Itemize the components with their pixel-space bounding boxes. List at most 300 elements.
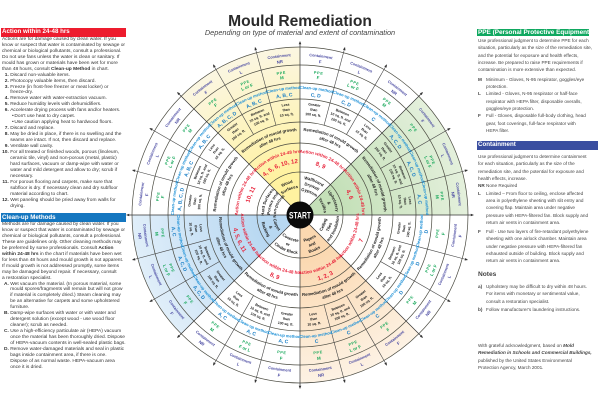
upholstery cell: less than 10 sq ft: Less — [407, 196, 413, 205]
concrete cell: less than 10 sq ft: 10 sq. ft. — [226, 296, 240, 308]
clean-up lettered list: of HEPA-vacuum contents in well-sealed plastic bags. — [10, 341, 126, 346]
wallboard common labels: after 48 hrs — [319, 137, 341, 148]
action numbered list: freeze-dry. — [10, 90, 33, 95]
upholstery cell: less than 10 sq ft: Clean-up method — [421, 181, 431, 216]
clean-up lettered list: once the material has been thoroughly dried. Dispose — [10, 335, 125, 340]
papers cell: less than 10 sq ft: Less — [309, 312, 317, 317]
action numbered list: 4. — [5, 96, 9, 101]
clean-up lettered list: bags inside containment area, if there is one. — [10, 353, 107, 358]
hard surfaces cell: greater than 100 sq ft: Containment — [138, 181, 145, 206]
heading: notes: Notes — [478, 271, 496, 278]
action numbered list: Ventilate wall cavity. — [10, 144, 53, 149]
upholstery cell: between 10 and 100 sq ft: Between — [398, 165, 407, 180]
carpet cell: between 10 and 100 sq ft: Clean-up method — [179, 245, 198, 278]
containment levels list: sheeting with one airlock chamber. Maintain area — [486, 236, 587, 241]
hard surfaces common labels — [213, 157, 284, 218]
panel: action within 24-48 hrs — [1, 28, 126, 210]
ceiling common labels: 7 — [358, 237, 366, 243]
wood cell: less than 10 sq ft: Clean-up method — [266, 84, 301, 94]
PPE levels list: respirator with HEPA filter, disposable overalls, — [486, 99, 582, 104]
clean-up lettered list: D. — [4, 347, 9, 352]
upholstery cell: between 10 and 100 sq ft: 10 sq. ft. and — [391, 164, 404, 185]
sector: wood surfaces — [193, 54, 300, 194]
wallboard cell: between 10 and 100 sq ft: Clean-up method — [333, 90, 364, 106]
upholstery cell: between 10 and 100 sq ft: Clean-up method — [408, 150, 427, 184]
concrete cell: between 10 and 100 sq ft: Between — [254, 303, 269, 312]
upholstery common labels: Remediation of mould growth — [362, 156, 387, 212]
wallboard cell: less than 10 sq ft: Containment — [388, 80, 407, 96]
clean-up lettered list: furniture. — [10, 305, 29, 310]
concrete cell: between 10 and 100 sq ft: PPE — [242, 340, 252, 347]
hard surfaces cell: between 10 and 100 sq ft: 10 sq. ft. and — [196, 164, 209, 185]
concrete common labels: after 48 hrs — [256, 287, 280, 301]
clean-up lettered list: be an alternative for carpets and some upholstered — [10, 299, 120, 304]
containment levels list: NR — [478, 183, 485, 188]
sector: concrete or cinder block — [196, 234, 302, 377]
ceiling cell: between 10 and 100 sq ft: Between — [388, 246, 397, 261]
upholstery common labels: 4, 6 — [346, 190, 354, 200]
papers cell: greater than 100 sq ft: Containment — [384, 329, 406, 347]
containment levels list: return air vents in containment area. — [486, 220, 560, 225]
action numbered list: material according to chart. — [10, 192, 69, 197]
wallboard common labels: Gypsum — [301, 188, 318, 197]
PPE levels list — [477, 76, 589, 134]
upholstery cell: less than 10 sq ft — [398, 182, 462, 215]
action numbered list: Accelerate drying process with fans and/or heaters. — [10, 108, 120, 113]
hard surfaces cell: between 10 and 100 sq ft: Clean-up method — [173, 149, 192, 183]
hard surfaces cell: less than 10 sq ft: Less — [208, 143, 216, 152]
action numbered list: Photocopy valuable items, then discard. — [10, 79, 96, 84]
concrete cell: greater than 100 sq ft: A, C — [278, 338, 289, 346]
carpet cell: less than 10 sq ft: M — [154, 232, 159, 236]
wood cell: greater than 100 sq ft: F — [213, 102, 219, 108]
concrete cell: between 10 and 100 sq ft: 10 sq. ft. and — [249, 306, 271, 318]
wallboard cell: less than 10 sq ft: C — [372, 118, 376, 122]
ceiling cell: between 10 and 100 sq ft: 10 sq. ft. and — [391, 244, 403, 266]
papers common labels: and — [308, 240, 317, 248]
hard surfaces common labels: after 48 hrs — [220, 172, 234, 197]
papers cell: between 10 and 100 sq ft: 10 sq. ft. and — [329, 306, 351, 318]
containment levels list: return air vents in containment area. — [486, 258, 560, 263]
papers cell: greater than 100 sq ft: 100 sq. ft. — [359, 296, 375, 309]
hard surfaces cell: less than 10 sq ft: M — [187, 127, 193, 134]
wood cell: between 10 and 100 sq ft: 100 sq. ft. — [253, 117, 270, 127]
upholstery cell: greater than 100 sq ft: A, C, D — [387, 133, 403, 151]
hard surfaces cell: greater than 100 sq ft — [138, 182, 202, 215]
upholstery cell: greater than 100 sq ft: Containment — [418, 107, 436, 129]
containment intro text: Use professional judgment to determine containment — [478, 154, 587, 159]
wood cell: between 10 and 100 sq ft: Containment — [227, 61, 251, 74]
clean-up lettered list: cleaner); scrub as needed. — [10, 323, 68, 328]
clean-up lettered list: once it is dried. — [10, 365, 43, 370]
carpet cell: between 10 and 100 sq ft: L or F — [162, 264, 171, 277]
upholstery cell: greater than 100 sq ft: Clean-up method — [388, 122, 414, 153]
papers cell: less than 10 sq ft — [300, 312, 332, 377]
PPE levels list: gear, foot coverings, full-face respirator with — [486, 121, 576, 126]
action numbered list: Reduce humidity levels with dehumidifiers. — [10, 102, 101, 107]
wood common labels: Surfaces — [279, 182, 300, 196]
wood cell: greater than 100 sq ft — [193, 80, 246, 141]
concrete cell: greater than 100 sq ft: F — [277, 372, 281, 378]
hard surfaces cell: greater than 100 sq ft: Greater — [187, 193, 193, 207]
containment levels list: covering flap. Maintain area under negative — [486, 205, 575, 210]
ceiling cell: less than 10 sq ft: M — [412, 300, 418, 306]
clean-up lettered list: mould spores/fragments will remain but will not grow — [10, 287, 122, 292]
papers cell: less than 10 sq ft: than — [310, 317, 318, 322]
notes list: b) — [478, 307, 482, 312]
clean-up lettered list: Wet vacuum the material. (In porous material, some — [10, 282, 121, 287]
wallboard cell: greater than 100 sq ft: F — [319, 60, 322, 64]
action intro text — [1, 37, 126, 73]
ceiling common labels: Ceiling — [318, 217, 329, 232]
carpet cell: greater than 100 sq ft: Clean-up method — [192, 274, 217, 304]
carpet cell: between 10 and 100 sq ft: Containment — [150, 263, 163, 287]
panel: containment — [477, 141, 598, 265]
wood common labels: Action within 24-48 hrs — [251, 144, 303, 173]
notes list: Upholstery may be difficult to dry within 48 hours. — [486, 284, 587, 289]
action numbered list: Use caution applying heat to hardwood floors. — [14, 120, 113, 125]
notes list: Follow manufacturer's laundering instructions. — [486, 307, 580, 312]
wood cell: between 10 and 100 sq ft: Between — [250, 108, 265, 117]
wood cell: less than 10 sq ft: PPE — [276, 71, 286, 76]
concrete cell: greater than 100 sq ft — [268, 312, 300, 377]
action numbered list: For porous flooring and carpets, make sure that — [10, 180, 112, 185]
ceiling cell: less than 10 sq ft: NR — [424, 309, 432, 317]
upholstery common labels: Textiles — [318, 198, 326, 213]
acknowledgement — [478, 342, 598, 371]
carpet cell: between 10 and 100 sq ft: A, C, D — [176, 255, 188, 273]
clean-up intro text: a restoration specialist. — [2, 276, 52, 281]
ceiling common labels: and Insulation — [325, 214, 343, 243]
carpet common labels: Carpet — [272, 217, 282, 232]
carpet common labels: after 48 hrs — [214, 236, 229, 260]
carpet common labels: & — [268, 225, 274, 229]
wood cell: less than 10 sq ft: than — [282, 107, 290, 112]
concrete common labels: or — [285, 241, 291, 247]
notes list: For items with monetary or sentimental value, — [486, 291, 580, 296]
hard surfaces cell: between 10 and 100 sq ft: Between — [193, 165, 202, 180]
ceiling cell: between 10 and 100 sq ft: Containment — [437, 262, 451, 286]
wallboard cell: greater than 100 sq ft — [300, 54, 333, 118]
containment levels list: L — [478, 191, 481, 196]
wood cell: greater than 100 sq ft: A, B, C, D — [216, 110, 239, 130]
upholstery cell: between 10 and 100 sq ft: A, C, D — [405, 160, 417, 178]
ceiling cell: greater than 100 sq ft: PPE — [435, 228, 440, 238]
upholstery cell: less than 10 sq ft: PPE — [439, 191, 444, 201]
ceiling cell: greater than 100 sq ft: F — [457, 234, 463, 238]
papers cell: between 10 and 100 sq ft: PPE — [348, 340, 358, 347]
acknowledgement: Remediation in Schools and Commercial Buildings, — [478, 350, 592, 355]
hard surfaces cell: between 10 and 100 sq ft: L — [154, 153, 160, 158]
wood cell: less than 10 sq ft: 10 sq. ft. — [279, 112, 294, 118]
action numbered list: May be dried in place, if there is no swelling and the — [10, 132, 121, 137]
action numbered list: 5. — [5, 102, 9, 107]
concrete cell: greater than 100 sq ft: Clean-up method — [267, 330, 302, 340]
action numbered list: 8. — [5, 132, 9, 137]
upholstery common labels: Action within 24-48 hrs — [344, 170, 365, 216]
panel: PPE — [477, 29, 589, 134]
wood cell: less than 10 sq ft: Less — [281, 102, 290, 108]
PPE levels list: F — [478, 113, 481, 118]
ceiling common labels: Remediation of mould growth — [355, 215, 387, 273]
hard surfaces cell: less than 10 sq ft: 10 sq. ft. — [214, 147, 226, 161]
upholstery cell: less than 10 sq ft: M — [435, 195, 440, 199]
wallboard cell: greater than 100 sq ft: F — [316, 76, 320, 80]
papers cell: greater than 100 sq ft — [356, 290, 404, 346]
papers cell: greater than 100 sq ft: C — [375, 313, 381, 320]
hard surfaces cell: greater than 100 sq ft: F — [160, 195, 165, 199]
clean-up lettered list: detergent solution (except wood - use wood floor — [10, 317, 115, 322]
wallboard cell: less than 10 sq ft: NR — [391, 90, 397, 96]
sector: hard surfaces — [138, 108, 284, 218]
hard surfaces cell: less than 10 sq ft: NR — [174, 117, 181, 125]
sector: carpet and backing — [138, 214, 280, 320]
containment intro text — [477, 150, 598, 182]
clean-up intro text: These are guidelines only. Other cleaning methods may — [2, 240, 121, 245]
clean-up intro text: within 24-48 hrs in the chart if materials have been wet — [2, 252, 122, 257]
hard surfaces cell: greater than 100 sq ft: 100 sq. ft. — [197, 193, 203, 210]
hard surfaces cell: less than 10 sq ft: PPE — [182, 123, 191, 133]
clean-up lettered list: Remove water-damaged materials and seal in plastic — [10, 347, 124, 352]
heading: clean-up: Clean-up Methods — [2, 214, 56, 221]
carpet cell: less than 10 sq ft: Containment — [142, 223, 149, 248]
hard surfaces cell: less than 10 sq ft: than — [212, 146, 220, 155]
clean-up lettered list: A. — [4, 282, 9, 287]
papers common labels: Remediation of mould growth — [300, 270, 359, 302]
ceiling cell: between 10 and 100 sq ft: 100 sq. ft. — [396, 249, 407, 265]
papers cell: greater than 100 sq ft: F — [396, 340, 401, 346]
panel: notes — [477, 271, 598, 313]
upholstery cell: between 10 and 100 sq ft: 100 sq. ft. — [388, 168, 398, 185]
heading: containment: Containment — [478, 141, 516, 148]
action intro text: Actions are for damage caused by clean water. If you — [2, 37, 116, 42]
wallboard cell: less than 10 sq ft: than — [361, 128, 368, 134]
clean-up lettered list: Dispose of as normal waste. HEPA-vacuum area — [10, 359, 115, 364]
papers common labels: 1, 2, 3 — [316, 270, 335, 283]
upholstery cell: less than 10 sq ft: A, C — [415, 194, 423, 205]
PPE levels list: M — [478, 77, 482, 82]
papers common labels: Books — [307, 244, 322, 254]
PPE intro text: Use professional judgment to determine PPE for each — [478, 38, 589, 43]
concrete cell: between 10 and 100 sq ft: L — [236, 361, 241, 367]
clean-up lettered list: C. — [4, 329, 9, 334]
hard surfaces common labels: Non-porous — [269, 192, 287, 220]
clean-up intro text: Methods are for damage caused by clean water. If you — [2, 222, 119, 227]
start hub: START — [289, 209, 311, 220]
action intro text: than 48 hours, consult Clean-up Method in chart. — [2, 67, 109, 72]
action numbered list: 6. — [5, 108, 9, 113]
wallboard cell: less than 10 sq ft: Less — [364, 124, 371, 130]
ceiling cell: greater than 100 sq ft: 100 sq. ft. — [406, 221, 412, 238]
action numbered list: ceramic tile, vinyl) and non-porous (metal, plastic) — [10, 156, 117, 161]
papers cell: between 10 and 100 sq ft: C — [346, 330, 352, 337]
hard surfaces common labels: 10, 11 — [245, 185, 258, 204]
concrete cell: less than 10 sq ft: PPE — [210, 321, 221, 330]
concrete cell: less than 10 sq ft: Less — [235, 290, 244, 298]
concrete cell: greater than 100 sq ft: than — [282, 317, 290, 322]
hard surfaces common labels: Remediation of mould growth — [207, 153, 240, 213]
upholstery cell: greater than 100 sq ft: F — [420, 118, 426, 124]
sector: ceiling tiles and insulation — [320, 214, 462, 319]
PPE intro text: increase. Be prepared to raise PPE requirements if — [478, 60, 583, 65]
papers cell: greater than 100 sq ft: than — [360, 294, 368, 302]
wallboard cell: less than 10 sq ft: Clean-up method — [364, 104, 391, 126]
papers cell: greater than 100 sq ft: Greater — [355, 288, 367, 300]
wallboard cell: between 10 and 100 sq ft — [330, 62, 372, 126]
carpet cell: between 10 and 100 sq ft: 10 sq. ft. and — [197, 244, 209, 266]
containment levels list — [477, 182, 598, 265]
wallboard cell: less than 10 sq ft: PPE — [382, 98, 391, 105]
concrete cell: between 10 and 100 sq ft: A, C — [245, 328, 257, 338]
wood common labels: 4, 5, 6, 10, 12 — [261, 156, 300, 179]
carpet cell: less than 10 sq ft: PPE — [160, 228, 165, 238]
wood cell: between 10 and 100 sq ft: L or F — [240, 82, 254, 92]
hard surfaces cell: less than 10 sq ft: A, B, C — [197, 133, 213, 151]
wood common labels: Wood — [280, 178, 294, 188]
papers common labels — [298, 235, 356, 299]
clean-up lettered list: if material is completely dried.) Steam cleaning may — [10, 293, 121, 298]
wallboard cell: less than 10 sq ft: M — [382, 103, 386, 108]
concrete cell: greater than 100 sq ft: F — [279, 356, 283, 361]
carpet cell: greater than 100 sq ft: than — [213, 275, 221, 283]
title: Mould Remediation — [228, 13, 372, 30]
upholstery cell: greater than 100 sq ft: PPE — [409, 123, 418, 133]
ceiling cell: less than 10 sq ft: Clean-up method — [383, 273, 409, 304]
papers cell: between 10 and 100 sq ft: L — [360, 361, 364, 367]
coloured sector backgrounds — [132, 47, 468, 383]
upholstery cell: between 10 and 100 sq ft: L or F — [423, 155, 433, 169]
concrete common labels: 8, 9 — [269, 272, 281, 282]
wallboard cell: greater than 100 sq ft: 100 sq. ft. — [305, 112, 321, 118]
ceiling cell: less than 10 sq ft: PPE — [406, 294, 415, 305]
action numbered list: For all treated or finished woods, porous (linoleum, — [10, 150, 119, 155]
PPE intro text: contamination is more extensive than expected. — [478, 67, 576, 72]
wood common labels: Remediation of mould growth — [238, 122, 299, 155]
concrete common labels: Concrete — [281, 231, 301, 245]
sector: papers and books — [298, 235, 404, 377]
action numbered list: Remove water with water-extraction vacuum. — [10, 96, 107, 101]
papers cell: less than 10 sq ft: 10 sq. ft. — [307, 321, 322, 327]
action numbered list: drying. — [10, 204, 25, 209]
papers cell: less than 10 sq ft: PPE — [313, 350, 323, 355]
containment levels list: Limited – From floor to ceiling, enclose affected — [486, 191, 583, 196]
PPE levels list: Full - Gloves, disposable full-body clothing, head — [486, 113, 586, 118]
clean-up lettered list — [1, 282, 126, 371]
papers cell: less than 10 sq ft: Containment — [308, 366, 333, 373]
panel: clean-up methods — [1, 213, 126, 371]
action numbered list: 10. — [2, 150, 9, 155]
papers cell: less than 10 sq ft: NR — [318, 372, 324, 378]
action numbered list: 2. — [5, 79, 9, 84]
upholstery cell: between 10 and 100 sq ft: Containment — [441, 142, 454, 166]
carpet cell: less than 10 sq ft — [138, 214, 202, 247]
ceiling cell: less than 10 sq ft: 10 sq. ft. — [381, 275, 393, 289]
ceiling cell: greater than 100 sq ft: F — [441, 232, 446, 236]
sector: wallboard, drywall, gypsum — [300, 54, 407, 197]
carpet cell: greater than 100 sq ft — [169, 270, 226, 320]
upholstery cell: greater than 100 sq ft: 100 sq. ft. — [373, 146, 387, 161]
containment intro text: remediation site, and the potential for exposure and — [478, 169, 584, 174]
clean-up intro text: for less than 48 hours and mould growth is not apparent. — [2, 258, 123, 263]
concrete cell: less than 10 sq ft: Containment — [195, 330, 216, 348]
upholstery common labels: Upholstery — [328, 190, 338, 212]
PPE levels list: Limited - Gloves, N-95 respirator or half-face — [486, 91, 578, 96]
carpet cell: less than 10 sq ft: A, C — [169, 226, 177, 237]
papers cell: greater than 100 sq ft: Clean-up method — [359, 298, 389, 323]
wood cell: between 10 and 100 sq ft: L — [239, 69, 243, 75]
wood cell: less than 10 sq ft: A, B, C — [276, 92, 293, 100]
papers cell: greater than 100 sq ft: PPE — [379, 321, 390, 330]
PPE intro text: and the potential for exposure and health effects, — [478, 53, 579, 58]
containment levels list: exhausted outside of building. Block supply and — [486, 251, 584, 256]
PPE levels list: goggles/eye protection. — [486, 106, 534, 111]
wallboard cell: greater than 100 sq ft: C, D — [311, 93, 320, 98]
carpet common labels — [216, 214, 280, 271]
action numbered list: water and mild detergent and allow to dry; scrub if — [10, 168, 117, 173]
papers cell: between 10 and 100 sq ft: Between — [331, 303, 346, 312]
upholstery cell: less than 10 sq ft: Containment — [455, 182, 462, 207]
hard surfaces cell: between 10 and 100 sq ft: PPE — [164, 155, 172, 166]
carpet cell: less than 10 sq ft: NR — [137, 233, 143, 239]
wallboard cell: greater than 100 sq ft: Greater — [308, 103, 321, 107]
wallboard cell: between 10 and 100 sq ft: 100 sq. ft. — [331, 118, 346, 126]
wood cell: greater than 100 sq ft: Containment — [192, 79, 214, 97]
sector: upholstery and textiles — [318, 108, 462, 216]
concrete cell: between 10 and 100 sq ft: F or L — [238, 344, 252, 353]
ceiling cell: greater than 100 sq ft: D — [424, 229, 430, 234]
action intro text: mould has grown or materials have been wet for more — [2, 61, 118, 66]
carpet cell: between 10 and 100 sq ft: PPE — [168, 263, 175, 273]
hard surfaces cell: between 10 and 100 sq ft: L or F — [167, 155, 177, 169]
carpet cell: less than 10 sq ft: Clean-up method — [175, 214, 185, 248]
papers cell: between 10 and 100 sq ft: 100 sq. ft. — [334, 311, 350, 322]
hard surfaces cell: greater than 100 sq ft: PPE — [156, 191, 161, 201]
action intro text: chemical or biological pollutants, consult a professional. — [2, 49, 121, 54]
PPE levels list: protection. — [486, 84, 508, 89]
concrete cell: between 10 and 100 sq ft: Clean-up method — [237, 317, 271, 336]
action intro text: know or suspect that water is contaminated by sewage or — [2, 43, 125, 48]
wood cell: greater than 100 sq ft: 100 sq. ft. — [231, 128, 246, 142]
upholstery cell: greater than 100 sq ft: Greater — [382, 141, 394, 154]
concrete common labels: Cinder Block — [273, 240, 300, 257]
wallboard common labels: 8, 9 — [316, 162, 326, 168]
carpet cell: greater than 100 sq ft: Greater — [215, 270, 227, 282]
action numbered list: • — [12, 120, 14, 125]
PPE intro text — [477, 36, 589, 74]
carpet cell: greater than 100 sq ft: Containment — [168, 299, 186, 321]
papers cell: between 10 and 100 sq ft: Containment — [348, 352, 372, 365]
wallboard cell: greater than 100 sq ft: PPE — [314, 71, 323, 75]
wood cell: greater than 100 sq ft: Clean-up method — [207, 101, 238, 127]
containment levels list: F — [478, 229, 481, 234]
ceiling cell: less than 10 sq ft: than — [379, 275, 387, 283]
action numbered list: seams are intact. If not, then discard and replace. — [10, 138, 116, 143]
carpet cell: between 10 and 100 sq ft — [149, 245, 212, 286]
papers cell: greater than 100 sq ft: F — [385, 327, 391, 332]
clean-up intro text: If mould growth is not addressed promptly, some items — [2, 264, 119, 269]
carpet cell: less than 10 sq ft: 10 sq. ft. — [188, 222, 194, 237]
carpet cell: between 10 and 100 sq ft: L — [148, 275, 154, 279]
wood common labels — [241, 128, 300, 194]
hard surfaces common labels: Porous and — [264, 190, 280, 216]
action numbered list: Discard non-valuable items. — [10, 73, 70, 78]
PPE levels list: Minimum - Gloves, N-95 respirator, goggles/eye — [486, 77, 584, 82]
hard surfaces cell: between 10 and 100 sq ft: Containment — [146, 141, 159, 166]
carpet cell: between 10 and 100 sq ft: 100 sq. ft. — [193, 249, 204, 265]
wallboard common labels — [300, 128, 358, 197]
ceiling cell: greater than 100 sq ft: Greater — [396, 221, 402, 234]
action numbered list — [1, 73, 126, 210]
